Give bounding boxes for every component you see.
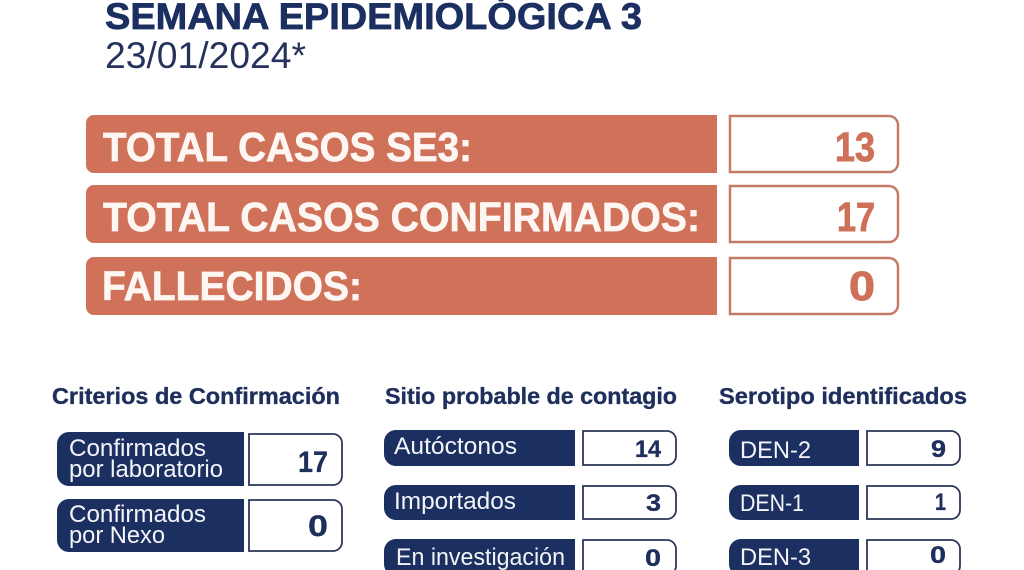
row: autóctonos: Autóctonos	[394, 433, 517, 460]
row: DEN-2: 9	[931, 436, 946, 463]
panel: total casos SE3: 13	[835, 124, 875, 170]
date: 23/01/2024*	[105, 35, 306, 76]
row: importados: Importados	[394, 488, 516, 515]
panel: total casos confirmados: TOTAL CASOS CONFIRMADOS:	[103, 194, 700, 240]
row: DEN-3: 0	[930, 542, 946, 569]
row: confirmados por laboratorio: Confirmados	[69, 435, 206, 462]
row: DEN-1: 1	[935, 489, 946, 516]
panel: total casos confirmados	[86, 185, 898, 243]
row: confirmados por nexo: 0	[308, 510, 328, 543]
row: confirmados por nexo: Confirmados	[69, 501, 206, 528]
panel: total casos confirmados: 17	[837, 194, 875, 240]
row: autóctonos	[384, 430, 676, 466]
row: confirmados por nexo: por Nexo	[69, 522, 165, 549]
panel: criterios de confirmación	[52, 383, 342, 552]
heading: sitio: Sitio probable de contagio	[385, 383, 677, 409]
row: importados	[384, 485, 676, 520]
panel: sitio probable de contagio	[384, 383, 677, 570]
panel: fallecidos	[86, 257, 898, 315]
row: DEN-2	[729, 430, 960, 466]
heading: criterios: Criterios de Confirmación	[52, 383, 340, 409]
row: confirmados por laboratorio: por laboratorio	[69, 456, 223, 483]
panel: fallecidos: 0	[849, 263, 875, 309]
panel: fallecidos: FALLECIDOS:	[102, 263, 362, 309]
heading: serotipo: Serotipo identificados	[719, 383, 967, 409]
row: confirmados por laboratorio	[57, 432, 342, 486]
row: DEN-2: DEN-2	[740, 437, 811, 464]
row: DEN-1: DEN-1	[740, 490, 804, 517]
row: confirmados por laboratorio: 17	[298, 446, 328, 479]
row: en investigación	[384, 539, 676, 570]
row: DEN-1	[729, 485, 960, 520]
row: importados: 3	[646, 490, 661, 517]
panel: serotipo identificados	[719, 383, 967, 570]
row: autóctonos: 14	[635, 436, 662, 463]
panel: total casos SE3	[86, 115, 898, 173]
row: DEN-3	[729, 539, 960, 570]
row: confirmados por nexo	[57, 499, 342, 552]
panel: total casos SE3: TOTAL CASOS SE3:	[103, 124, 472, 170]
